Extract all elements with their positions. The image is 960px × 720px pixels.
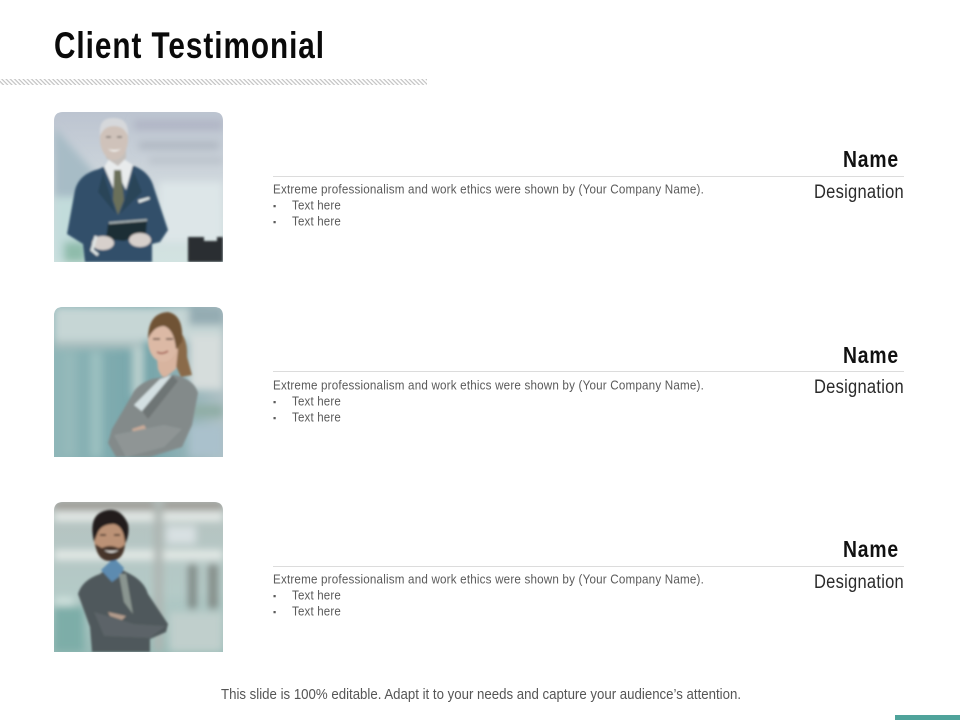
- designation: Designation: [814, 377, 904, 398]
- name: Name: [843, 536, 899, 562]
- name: Name: [843, 146, 899, 172]
- hatched title underline: [0, 79, 427, 85]
- chair: [188, 237, 223, 262]
- testimonial text: [273, 378, 704, 424]
- testimonial text: Extreme professionalism and work ethics were shown by (Your Company Name).: [273, 182, 704, 196]
- designation: Designation: [814, 182, 904, 203]
- testimonial text: Text here: [292, 604, 341, 618]
- testimonial text: Text here: [292, 394, 341, 408]
- name: Name: [843, 342, 899, 368]
- panel: testimonial 3: [54, 502, 904, 652]
- testimonial text: ▪: [273, 201, 276, 211]
- testimonial text: ▪: [273, 397, 276, 407]
- testimonial text: Extreme professionalism and work ethics were shown by (Your Company Name).: [273, 572, 704, 586]
- testimonial text: Text here: [292, 214, 341, 228]
- divider rule: [273, 176, 904, 178]
- photo: bearded man in grey suit with arms crossed: [54, 502, 223, 652]
- title: Client Testimonial: [54, 25, 325, 66]
- testimonial text: ▪: [273, 591, 276, 601]
- testimonial text: Text here: [292, 588, 341, 602]
- photo: man in navy suit holding tablet: [54, 112, 223, 262]
- divider rule: [273, 370, 904, 372]
- testimonial text: Extreme professionalism and work ethics were shown by (Your Company Name).: [273, 378, 704, 392]
- teal corner accent: [895, 715, 960, 720]
- testimonial text: [273, 572, 704, 618]
- panel: testimonial 2: [54, 307, 904, 457]
- testimonial text: ▪: [273, 607, 276, 617]
- testimonial text: ▪: [273, 413, 276, 423]
- testimonial text: Text here: [292, 198, 341, 212]
- photo: woman in grey blazer with arms crossed: [54, 307, 223, 457]
- testimonial text: ▪: [273, 217, 276, 227]
- footer note: This slide is 100% editable. Adapt it to your needs and capture your audience’s attention.: [221, 686, 741, 703]
- panel: testimonial 1: [54, 112, 904, 262]
- testimonial text: [273, 182, 704, 228]
- testimonial text: Text here: [292, 410, 341, 424]
- divider rule: [273, 566, 904, 568]
- designation: Designation: [814, 572, 904, 593]
